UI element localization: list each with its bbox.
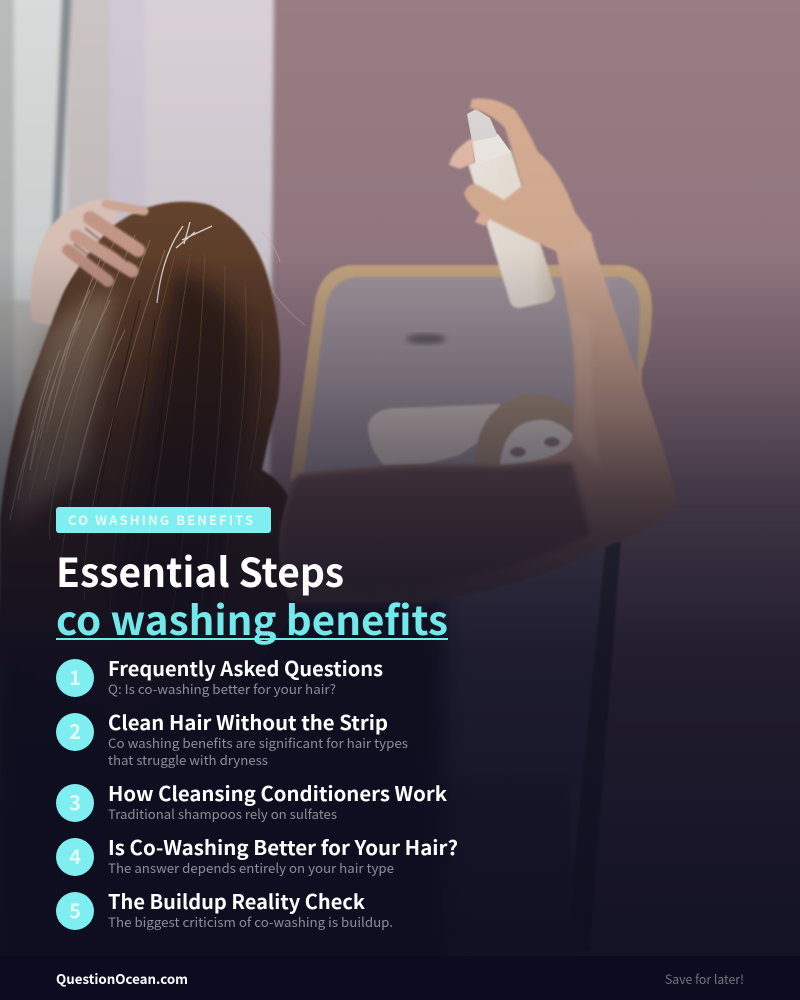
step 2: Clean Hair Without the Strip (108, 707, 388, 736)
step 2 (56, 707, 408, 769)
step 2: Co washing benefits are significant for hair types (108, 733, 408, 752)
mirror (290, 265, 652, 960)
lower mirror frame and reflection (428, 545, 604, 785)
step 5 (56, 886, 393, 931)
white window reveal (0, 0, 274, 1000)
step 1: Frequently Asked Questions (108, 653, 383, 682)
hand holding bottle (449, 98, 592, 252)
step 5: 5 (69, 895, 81, 924)
mirror reflection of the woman (368, 394, 575, 470)
step 3 (56, 778, 447, 823)
main title: co washing benefits (56, 589, 448, 647)
step 2: that struggle with dryness (108, 750, 268, 769)
step 5: The Buildup Reality Check (108, 886, 365, 915)
step 3: 3 (69, 787, 81, 816)
main title: Essential Steps (56, 541, 344, 599)
torso and lower left shadow (0, 600, 445, 1000)
raised arm (279, 232, 677, 602)
step 1: Q: Is co-washing better for your hair? (108, 679, 336, 698)
step 3: Traditional shampoos rely on sulfates (108, 804, 337, 823)
hand in hair (31, 198, 144, 325)
step 4: Is Co-Washing Better for Your Hair? (108, 832, 458, 861)
tag badge: CO WASHING BENEFITS (68, 510, 253, 529)
step 5: The biggest criticism of co-washing is buildup. (108, 912, 393, 931)
step 1: 1 (69, 662, 81, 691)
footer bar: QuestionOcean.com (56, 968, 188, 988)
footer bar (0, 956, 800, 1000)
step 4 (56, 832, 458, 877)
footer bar: Save for later! (665, 969, 744, 988)
step 4: 4 (69, 841, 81, 870)
spray bottle (467, 109, 555, 308)
pink wall (260, 0, 800, 1000)
tag badge (56, 507, 271, 533)
step 1 (56, 653, 383, 698)
hair strands (10, 230, 262, 620)
main title (56, 541, 448, 647)
hair (0, 202, 305, 720)
step 2: 2 (69, 716, 81, 745)
step 4: The answer depends entirely on your hair type (108, 858, 394, 877)
step 3: How Cleansing Conditioners Work (108, 778, 447, 807)
